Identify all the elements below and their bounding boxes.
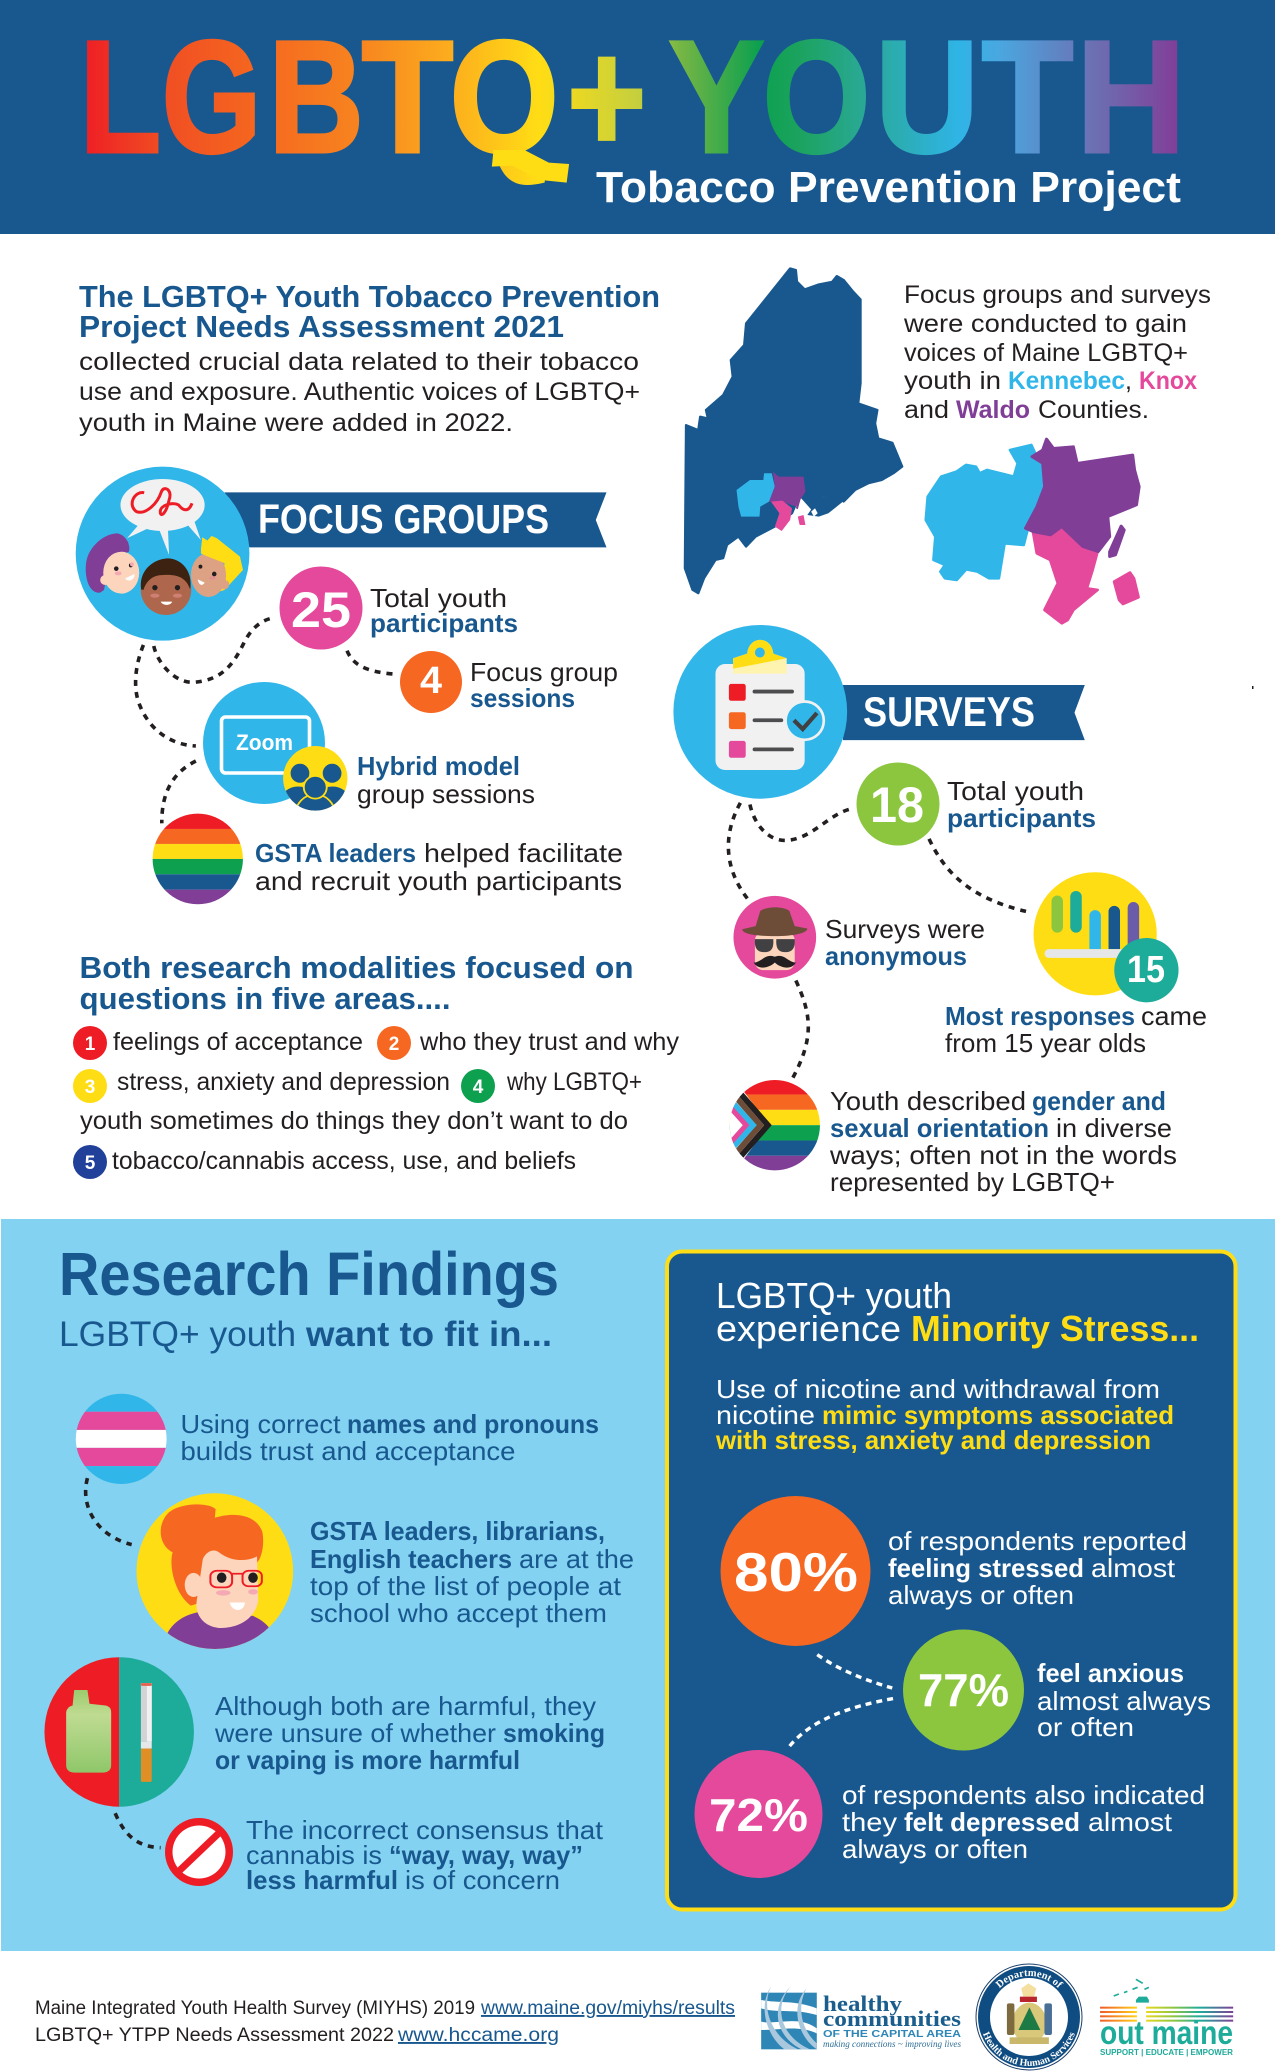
text: names and pronouns	[180, 1409, 599, 1466]
text: GSTA leaders, librarians, English teachers: top of the list of people at	[310, 1571, 622, 1601]
heading	[80, 950, 634, 1016]
logo: healthy communities: making connections ~ improving lives	[823, 2039, 961, 2049]
title: LGBTQ+ YOUTH: T	[982, 7, 1074, 186]
panel heading: Minority Stress...	[911, 1308, 1199, 1349]
area 4	[80, 1068, 642, 1135]
icon: three faces with speech bubble	[76, 467, 249, 641]
panel: surveys	[673, 625, 1207, 1197]
text: most responses: from 15 year olds	[945, 1028, 1146, 1058]
connector lines	[728, 803, 1032, 1079]
stat: 77% anxious: almost always	[1037, 1686, 1211, 1716]
icon: clipboard checklist	[673, 625, 847, 799]
title: LGBTQ+ YOUTH: H	[1076, 7, 1186, 186]
stat: 77% anxious: or often	[1037, 1712, 1134, 1742]
stat: 80% stressed: of respondents reported	[888, 1526, 1187, 1556]
text: smoking or vaping	[214, 1691, 605, 1775]
text: cannabis consensus	[246, 1815, 604, 1895]
icon: progress pride flag circle	[730, 1080, 820, 1170]
text: GSTA leaders, librarians, English teachers: GSTA leaders, librarians,	[310, 1516, 605, 1546]
area 5: 5	[85, 1153, 96, 1174]
connector lines	[86, 1478, 161, 1848]
text: cannabis consensus: is of concern	[405, 1865, 560, 1895]
text: GSTA leaders, librarians, English teachers	[310, 1516, 634, 1628]
text: county description: Focus groups and surveys	[904, 281, 1211, 309]
text: county description	[903, 281, 1211, 424]
county close-up map	[926, 439, 1139, 623]
area 2: 2	[389, 1034, 399, 1055]
text: GSTA leaders: GSTA leaders	[255, 838, 416, 868]
text: most responses: Most responses	[945, 1001, 1135, 1031]
area 3: stress, anxiety and depression	[117, 1068, 450, 1096]
title: LGBTQ+ YOUTH: T	[362, 7, 454, 186]
text: nicotine withdrawal	[715, 1374, 1174, 1455]
text: gender and sexual orientation: represented by LGBTQ+	[830, 1167, 1115, 1197]
icon: vape and cigarette	[42, 1656, 196, 1809]
text: anonymous	[825, 914, 985, 971]
intro text block: collected crucial data related to their tobacco	[79, 348, 639, 376]
stat: 77% anxious	[903, 1630, 1211, 1750]
text: gender and sexual orientation: sexual orientation	[830, 1113, 1049, 1143]
intro text block: use and exposure. Authentic voices of LGBTQ+	[79, 378, 640, 406]
text: GSTA leaders: helped facilitate	[424, 838, 623, 868]
stat: 72% depressed: always or often	[842, 1834, 1028, 1864]
text: nicotine withdrawal: mimic symptoms associated	[822, 1400, 1174, 1430]
text: county description: voices of Maine LGBTQ+	[904, 339, 1188, 367]
intro text block: Project Needs Assessment 2021	[79, 309, 564, 344]
panel: focus groups	[76, 467, 623, 905]
text: county description: Knox	[1139, 367, 1197, 395]
logo: healthy communities: OF THE CAPITAL AREA	[823, 2029, 961, 2040]
stat: 80% stressed: always or often	[888, 1580, 1074, 1610]
text: cannabis consensus: less harmful	[246, 1865, 398, 1895]
area 3: 3	[85, 1077, 95, 1098]
stat: 25 participants: Total youth	[370, 583, 507, 613]
stat: 77% anxious: 77%	[918, 1664, 1009, 1716]
text: county description: Kennebec	[1008, 367, 1125, 395]
logo: healthy communities: healthy	[823, 1991, 902, 2016]
footer: sources: www.maine.gov/miyhs/results	[480, 1998, 735, 2019]
logo: out maine: SUPPORT | EDUCATE | EMPOWER	[1100, 2048, 1233, 2057]
title: LGBTQ+ YOUTH: G	[162, 7, 262, 186]
logo: department of health and human services seal: Health and Human Services	[982, 2031, 1075, 2066]
text: county description: Waldo	[956, 396, 1030, 424]
heading: questions in five areas....	[80, 981, 450, 1016]
area 3	[73, 1068, 450, 1103]
stat: 25 participants: 25	[291, 582, 351, 638]
text: cannabis consensus: cannabis is	[246, 1840, 382, 1870]
text: cannabis consensus: “way, way, way”	[389, 1840, 583, 1870]
text: smoking or vaping: were unsure of whether	[214, 1718, 496, 1748]
focus groups banner: FOCUS GROUPS	[258, 496, 549, 542]
text: GSTA leaders, librarians, English teachers: school who accept them	[310, 1598, 607, 1628]
stat: 72% depressed: 72%	[709, 1789, 808, 1841]
area 1: feelings of acceptance	[113, 1028, 363, 1056]
footer: sources: Maine Integrated Youth Health Survey (MIYHS) 2019	[35, 1998, 475, 2019]
stat: 4 sessions: 4	[420, 660, 442, 702]
stat: 72% depressed: almost	[1088, 1807, 1173, 1837]
text: names and pronouns: Using correct	[180, 1409, 341, 1439]
text: hybrid model	[357, 751, 535, 809]
area 1: 1	[85, 1034, 96, 1055]
stat: 18 participants: participants	[947, 803, 1096, 833]
icon: anonymous person	[733, 896, 816, 979]
stat: 80% stressed: almost	[1091, 1553, 1176, 1583]
intro text block	[79, 279, 660, 437]
text: names and pronouns: builds trust and acceptance	[180, 1436, 516, 1466]
icon: zoom hybrid model	[203, 682, 348, 811]
title: LGBTQ+ YOUTH: +	[567, 7, 646, 186]
stat: 18 participants: Total youth	[947, 776, 1084, 806]
stat: 72% depressed: they	[842, 1807, 897, 1837]
area 4: why LGBTQ+	[506, 1068, 642, 1096]
text: gender and sexual orientation	[829, 1086, 1177, 1197]
stat: 80% stressed: 80%	[734, 1541, 858, 1603]
text: smoking or vaping: or vaping is more harmful	[215, 1745, 520, 1775]
text: county description: youth in	[904, 367, 1001, 395]
text: county description: Counties.	[1038, 396, 1149, 424]
icon: transgender flag circle	[74, 1393, 169, 1485]
stat: 80% stressed: feeling stressed	[888, 1553, 1084, 1583]
stat: 72% depressed	[694, 1750, 1205, 1878]
area 2: who they trust and why	[419, 1028, 679, 1056]
surveys banner: SURVEYS	[863, 688, 1035, 735]
footer: sources	[35, 1998, 735, 2046]
title: LGBTQ+ YOUTH: Y	[668, 7, 764, 186]
stat: 4 sessions	[400, 651, 618, 713]
text: most responses	[945, 1001, 1207, 1058]
text: nicotine withdrawal: nicotine	[716, 1400, 815, 1430]
title: LGBTQ+ YOUTH: B	[268, 7, 364, 186]
stray mark	[1252, 686, 1254, 689]
footer: sources: www.hccame.org	[397, 2025, 559, 2046]
stat: 25 participants	[280, 566, 518, 650]
footer: sources: LGBTQ+ YTPP Needs Assessment 2022	[35, 2025, 394, 2046]
logo: healthy communities: communities	[823, 2006, 962, 2031]
heading: research findings: Research Findings	[59, 1240, 559, 1308]
icon: zoom hybrid model: Zoom	[236, 730, 293, 755]
text: hybrid model: group sessions	[357, 779, 535, 809]
text: GSTA leaders, librarians, English teachers: English teachers	[310, 1544, 512, 1574]
map of Maine	[685, 268, 902, 593]
panel: research findings	[1, 1219, 1275, 1951]
logo: out maine	[1100, 1979, 1233, 2057]
heading: Both research modalities focused on	[80, 950, 634, 985]
title: LGBTQ+ YOUTH: L	[79, 7, 161, 186]
connector lines	[789, 1655, 893, 1747]
panel: minority stress	[667, 1252, 1236, 1910]
title: LGBTQ+ YOUTH	[79, 7, 1186, 186]
panel heading	[716, 1275, 1199, 1349]
area 4: 4	[473, 1077, 484, 1098]
stat: 25 participants: participants	[370, 608, 518, 638]
text: county description: were conducted to gain	[903, 310, 1187, 338]
panel: header	[0, 0, 1275, 234]
stat: 77% anxious: feel anxious	[1037, 1658, 1184, 1688]
text: GSTA leaders, librarians, English teachers: are at the	[519, 1544, 634, 1574]
text: cannabis consensus: The incorrect consensus that	[246, 1815, 604, 1845]
panel heading: experience	[716, 1308, 901, 1349]
logo: out maine: out maine	[1100, 2014, 1233, 2051]
stat: 4 sessions: Focus group	[470, 657, 618, 687]
text: nicotine withdrawal: with stress, anxiety and depression	[715, 1425, 1151, 1455]
text: GSTA leaders: and recruit youth participants	[255, 866, 622, 896]
text: hybrid model: Hybrid model	[357, 751, 520, 781]
icon: bar chart 15: 15	[1127, 949, 1165, 991]
icon: prohibition sign	[165, 1818, 233, 1886]
title: LGBTQ+ YOUTH: U	[875, 7, 979, 186]
icon: rainbow flag circle	[148, 813, 248, 905]
stat: 18 participants	[856, 762, 1096, 846]
text: gender and sexual orientation: Youth described	[830, 1086, 1026, 1116]
text: names and pronouns: names and pronouns	[347, 1409, 599, 1439]
text: gender and sexual orientation: gender and	[1032, 1086, 1166, 1116]
text: most responses: came	[1141, 1001, 1207, 1031]
subheading: want to fit in...	[305, 1315, 552, 1354]
text: county description: ,	[1125, 367, 1132, 395]
logo: department of health and human services seal	[976, 1964, 1082, 2070]
text: anonymous: anonymous	[825, 941, 967, 971]
text: gender and sexual orientation: in diverse	[1056, 1113, 1172, 1143]
intro text block: The LGBTQ+ Youth Tobacco Prevention	[79, 279, 660, 314]
stat: 4 sessions: sessions	[470, 683, 575, 713]
stat: 72% depressed: felt depressed	[904, 1807, 1080, 1837]
text: gender and sexual orientation: ways; often not in the words	[829, 1140, 1177, 1170]
panel: five question areas	[73, 950, 679, 1179]
text: smoking or vaping: Although both are harmful, they	[215, 1691, 596, 1721]
stat: 18 participants: 18	[870, 777, 924, 833]
logo: healthy communities	[761, 1986, 962, 2049]
logo: department of health and human services seal: Department of	[995, 1970, 1064, 1988]
icon: woman with glasses	[136, 1493, 293, 1656]
stat: 72% depressed: of respondents also indicated	[842, 1780, 1205, 1810]
connector lines	[136, 618, 393, 823]
subheading: LGBTQ+ youth	[59, 1315, 296, 1354]
text: smoking or vaping: smoking	[503, 1718, 605, 1748]
area 5: tobacco/cannabis access, use, and beliefs	[112, 1147, 576, 1175]
text: GSTA leaders	[255, 838, 623, 896]
stat: 80% stressed	[720, 1496, 1187, 1646]
text: county description: and	[904, 396, 949, 424]
text: anonymous: Surveys were	[825, 914, 985, 944]
intro text block: youth in Maine were added in 2022.	[79, 409, 513, 437]
icon: bar chart 15	[1034, 872, 1179, 1002]
title: LGBTQ+ YOUTH: O	[762, 7, 870, 186]
panel heading: LGBTQ+ youth	[716, 1275, 952, 1316]
subtitle: Tobacco Prevention Project	[596, 163, 1181, 212]
area 2	[377, 1026, 679, 1060]
text: nicotine withdrawal: Use of nicotine and withdrawal from	[716, 1374, 1160, 1404]
title: LGBTQ+ YOUTH: Q	[450, 7, 559, 186]
area 4: youth sometimes do things they don’t want to do	[80, 1107, 628, 1135]
